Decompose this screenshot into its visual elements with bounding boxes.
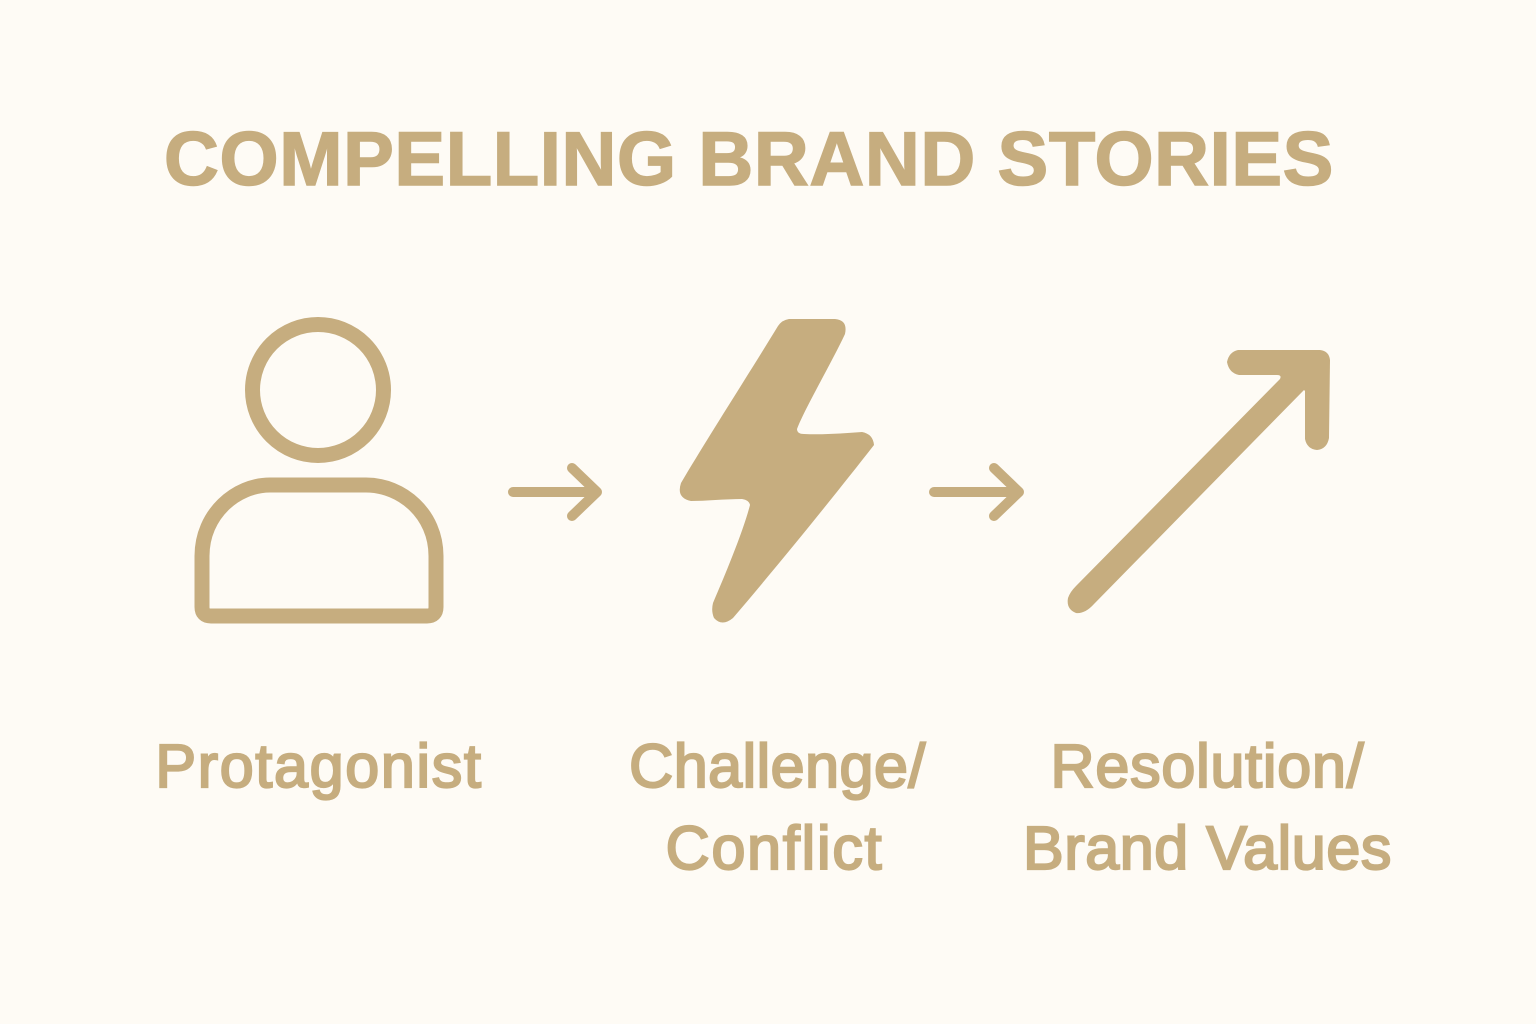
icon: protagonist person — [194, 317, 444, 624]
label: resolution / brand values: Resolution/ — [1050, 732, 1364, 800]
arrow: challenge to resolution — [929, 463, 1024, 521]
label: challenge / conflict: Challenge/ — [629, 732, 926, 800]
label: protagonist: Protagonist — [155, 732, 483, 800]
label: resolution / brand values: Brand Values — [1023, 814, 1392, 882]
icon: lightning bolt — [680, 319, 874, 622]
label: resolution / brand values — [1023, 732, 1392, 882]
label: challenge / conflict: Conflict — [666, 814, 883, 882]
label: challenge / conflict — [629, 732, 927, 882]
arrow: protagonist to challenge — [508, 463, 602, 521]
icon: rising arrow — [1068, 350, 1330, 614]
title: COMPELLING BRAND STORIES — [164, 117, 1334, 202]
